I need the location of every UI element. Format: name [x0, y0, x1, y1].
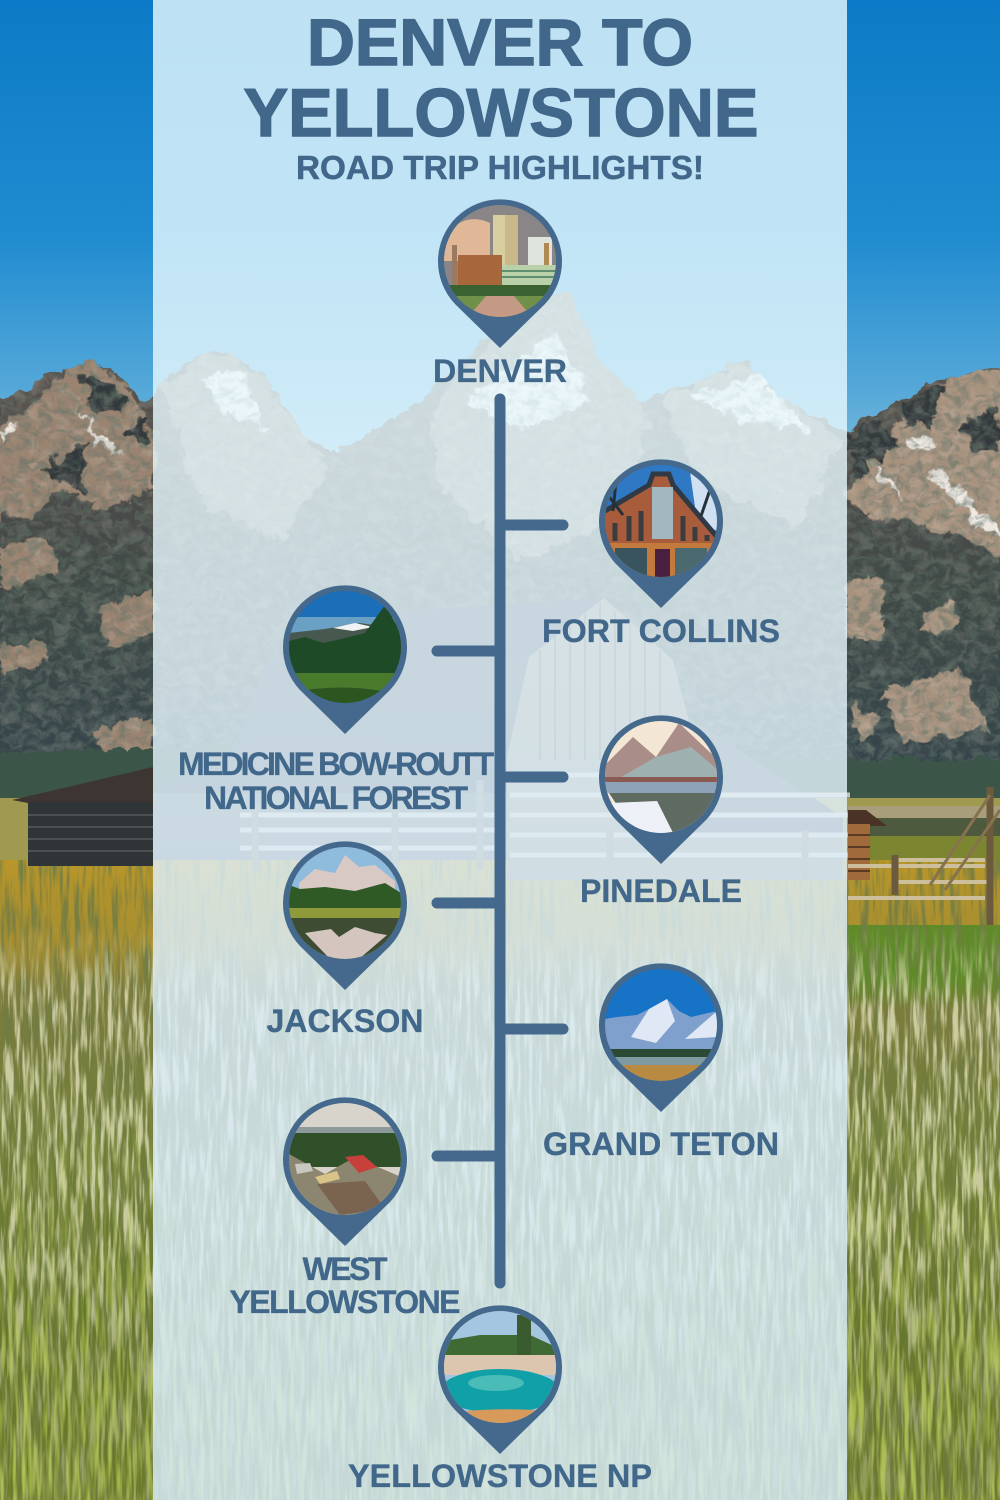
pin: Denver [438, 199, 562, 348]
mountain range [0, 280, 1000, 830]
label: West Yellowstone: WEST [302, 1251, 388, 1287]
label: Medicine Bow-Routt National Forest [178, 746, 494, 816]
route timeline [437, 399, 563, 1283]
label: Jackson: JACKSON [266, 1003, 424, 1039]
pin: Yellowstone NP [438, 1305, 562, 1454]
label: Denver: DENVER [433, 353, 567, 389]
grass field [0, 860, 1000, 1500]
right fence [848, 787, 1000, 925]
label: West Yellowstone [230, 1251, 460, 1320]
title: DENVER TO [307, 5, 693, 79]
pin: Jackson [283, 841, 407, 990]
label: Pinedale: PINEDALE [580, 873, 742, 909]
pin: Medicine Bow-Routt National Forest [283, 585, 407, 734]
label: West Yellowstone: YELLOWSTONE [230, 1284, 460, 1320]
label: Medicine Bow-Routt National Forest: MEDICINE BOW-ROUTT [178, 746, 494, 782]
large barn [153, 598, 850, 880]
translucent center panel [153, 0, 847, 1500]
pin: Grand Teton [599, 963, 723, 1112]
label: Fort Collins: FORT COLLINS [542, 613, 780, 649]
right cabin [848, 810, 887, 880]
pin: Pinedale [599, 715, 723, 864]
title: YELLOWSTONE [244, 75, 758, 151]
label: Grand Teton: GRAND TETON [543, 1126, 779, 1162]
meadow [0, 798, 1000, 878]
left log cabin [12, 767, 153, 866]
pin: West Yellowstone [283, 1097, 407, 1246]
pin: Fort Collins [599, 459, 723, 608]
label: Medicine Bow-Routt National Forest: NATIONAL FOREST [204, 780, 468, 816]
label: Yellowstone NP: YELLOWSTONE NP [348, 1458, 652, 1494]
subtitle: ROAD TRIP HIGHLIGHTS! [296, 149, 704, 186]
title [244, 5, 758, 151]
